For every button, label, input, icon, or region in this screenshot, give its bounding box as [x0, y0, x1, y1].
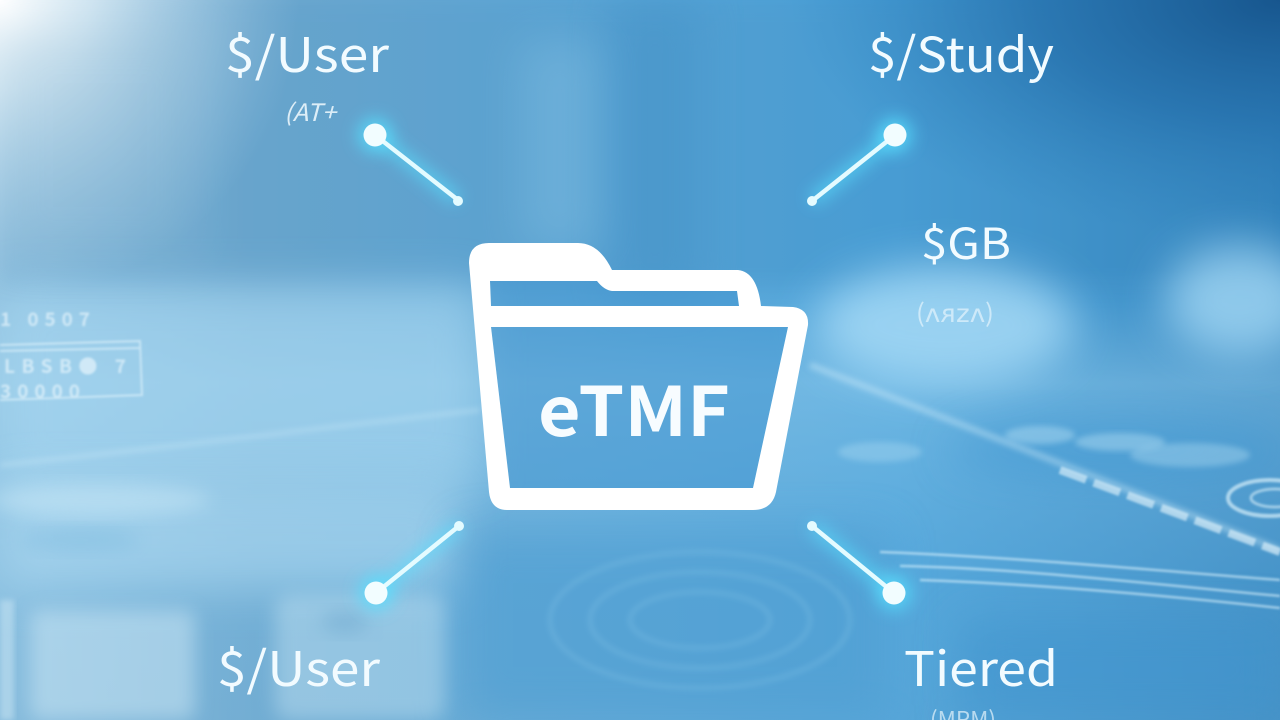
- label: $/User bottom: $/User: [217, 630, 380, 700]
- label: $/Study: $/Study: [868, 16, 1054, 86]
- sublabel: $GB: (ᴧᴙᴢᴧ): [916, 294, 994, 330]
- label: $GB: [916, 210, 1011, 330]
- background ghost text panel: 1 0507: [0, 305, 90, 332]
- label: Tiered: Tiered: [904, 630, 1058, 700]
- connector: bottom-right node: [807, 521, 912, 611]
- label: eTMF: eTMF: [538, 357, 730, 456]
- label: $/User top: $/User: [225, 16, 389, 86]
- label: $/User top: [225, 16, 389, 128]
- connector: top-left node: [357, 117, 463, 206]
- background ghost text panel: LBSB● 7: [4, 352, 126, 379]
- label: $GB: $GB: [921, 210, 1011, 272]
- connector: top-right node: [807, 117, 913, 206]
- connector: bottom-left node: [358, 521, 464, 611]
- sublabel: top-left: (AT+: [284, 93, 338, 128]
- icon: eTMF folder: [469, 243, 808, 510]
- background ghost text panel: 30000: [0, 377, 80, 404]
- background ghost text panel: [0, 305, 142, 404]
